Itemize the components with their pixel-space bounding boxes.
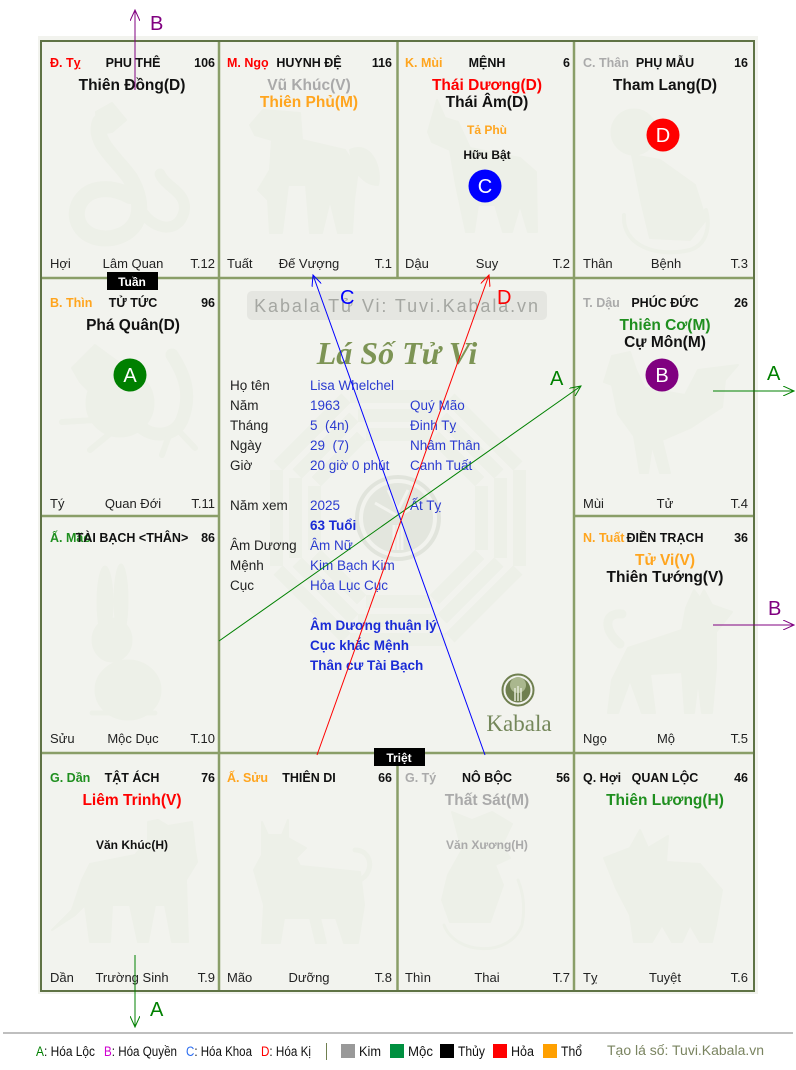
- footer rule: [3, 1032, 793, 1034]
- palace: Quan Lộc: 46: [734, 771, 748, 785]
- chart title: Lá Số Tử Vi: [316, 335, 477, 371]
- legend: five elements: Hỏa: [511, 1044, 534, 1059]
- watermark banner: [247, 291, 547, 320]
- palace: Điền Trạch: Mộ: [657, 731, 675, 746]
- palace: Nô Bộc: Văn Xương(H): [446, 838, 528, 852]
- palace: Thiên Di: THIÊN DI: [282, 770, 336, 785]
- palace: Điền Trạch: Thiên Tướng(V): [607, 569, 723, 586]
- personal information block: Hỏa Lục Cục: [310, 578, 388, 593]
- arrow: C blue diagonal: [313, 275, 485, 755]
- palace: Mệnh: Suy: [476, 256, 499, 271]
- arrow: D red diagonal: D: [497, 287, 511, 309]
- palace: Thiên Di: Dưỡng: [288, 970, 330, 985]
- palace: Tật Ách: [50, 770, 215, 985]
- palace: Phúc Đức: [583, 295, 748, 511]
- palace: Quan Lộc: Thiên Lương(H): [606, 792, 724, 809]
- palace: Tật Ách: T.9: [198, 970, 215, 985]
- palace: Tật Ách: 76: [201, 771, 215, 785]
- personal information block: Đinh Tỵ: [410, 418, 457, 433]
- arrow: B purple right: B: [768, 598, 781, 620]
- palace: Phúc Đức: B: [655, 365, 669, 387]
- palace: Nô Bộc: Thai: [474, 970, 500, 985]
- personal information block: Năm xem: [230, 498, 288, 513]
- arrow: B purple right: [713, 598, 794, 625]
- personal information block: Họ tên: [230, 378, 270, 393]
- palace: Phúc Đức: 26: [734, 296, 748, 310]
- palace: Phúc Đức: Thiên Cơ(M): [619, 317, 711, 334]
- personal information block: Ngày: [230, 438, 262, 453]
- palace: Quan Lộc: Tuyệt: [649, 970, 681, 985]
- palace: Tật Ách: Trường Sinh: [95, 970, 169, 985]
- personal information block: Âm Dương thuận lý: [310, 618, 437, 633]
- palace: Phu Thê: [50, 55, 215, 271]
- personal information block: Kim Bạch Kim: [310, 558, 395, 573]
- zodiac watermark illustrations: [52, 100, 738, 949]
- personal information block: Năm: [230, 398, 259, 413]
- legend: five elements: Thủy: [458, 1044, 485, 1059]
- palace: Phụ Mẫu: C. Thân: [583, 56, 629, 70]
- palace: Tật Ách: Văn Khúc(H): [96, 838, 168, 852]
- badge: Triệt: Triệt: [386, 751, 412, 765]
- palace: Phụ Mẫu: [583, 55, 748, 271]
- palace: Tử Tức: 96: [201, 296, 215, 310]
- legend: five elements: Mộc: [408, 1044, 433, 1059]
- palace: Huynh Đệ: Tuất: [227, 256, 253, 271]
- palace: Tật Ách: TẬT ÁCH: [105, 770, 159, 785]
- palace: Tài Bạch: Mộc Dục: [107, 731, 159, 746]
- palace: Mệnh: Dậu: [405, 256, 429, 271]
- palace: Nô Bộc: 56: [556, 771, 570, 785]
- palace: Phu Thê: Đ. Tỵ: [50, 56, 81, 70]
- palace: Điền Trạch: Tử Vi(V): [635, 552, 695, 569]
- palace: Tài Bạch: Ấ. Mão: [50, 530, 91, 545]
- palace: Nô Bộc: G. Tý: [405, 771, 436, 785]
- personal information block: Lisa Whelchel: [310, 378, 394, 393]
- palace: Mệnh: Tả Phù: [467, 123, 507, 137]
- palace: Quan Lộc: Tỵ: [583, 970, 598, 985]
- arrow: A green diagonal: [219, 368, 581, 641]
- personal information block: 63 Tuổi: [310, 518, 356, 533]
- badge: Triệt: [374, 748, 425, 766]
- legend: five elements: Kim: [359, 1044, 381, 1059]
- palace: Mệnh: MỆNH: [469, 55, 505, 70]
- personal information block: Tháng: [230, 418, 268, 433]
- palace: Mệnh: C: [478, 176, 492, 198]
- Kabala logo: Kabala: [486, 711, 552, 736]
- palace: Thiên Di: 66: [378, 771, 392, 785]
- legend: transformations: C: Hóa Khoa: [186, 1044, 252, 1059]
- palace: Phúc Đức: T. Dậu: [583, 296, 620, 310]
- palace: Nô Bộc: [405, 770, 570, 985]
- palace: Tử Tức: A: [123, 365, 137, 387]
- palace: Tài Bạch: 86: [201, 531, 215, 545]
- palace: Phúc Đức: Cự Môn(M): [624, 334, 706, 351]
- palace: Phu Thê: 106: [194, 56, 215, 70]
- palace: Thiên Di: [227, 770, 392, 985]
- palace: Tật Ách: Dần: [50, 970, 74, 985]
- palace: Tử Tức: Phá Quân(D): [86, 317, 180, 334]
- arrow: B purple up: [135, 10, 163, 90]
- palace: Phúc Đức: T.4: [731, 496, 748, 511]
- arrow: D red diagonal: [317, 275, 511, 755]
- personal information block: 29 (7): [310, 438, 349, 453]
- palace: Phụ Mẫu: Bệnh: [651, 256, 681, 271]
- palace: Mệnh: Thái Dương(D): [432, 77, 542, 94]
- watermark banner: Kabala Tử Vi: Tuvi.Kabala.vn: [254, 296, 540, 316]
- personal information block: [230, 378, 480, 673]
- palace: Tật Ách: G. Dần: [50, 771, 90, 785]
- palace: Điền Trạch: [583, 530, 748, 746]
- palace: Mệnh: K. Mùi: [405, 56, 442, 70]
- personal information block: Cục: [230, 578, 254, 593]
- palace: Tử Tức: TỬ TỨC: [109, 295, 157, 310]
- legend: transformations: A: Hóa Lộc: [36, 1044, 95, 1059]
- palace: Huynh Đệ: M. Ngọ: [227, 56, 269, 70]
- palace: Điền Trạch: 36: [734, 531, 748, 545]
- legend divider: [326, 1043, 328, 1060]
- personal information block: Mệnh: [230, 558, 264, 573]
- personal information block: 2025: [310, 498, 340, 513]
- palace: Tử Tức: [50, 295, 215, 511]
- legend: five elements: [341, 1044, 582, 1059]
- palace: Huynh Đệ: Vũ Khúc(V): [267, 77, 351, 94]
- palace: Huynh Đệ: HUYNH ĐỆ: [276, 55, 342, 70]
- arrow: A green right: [713, 363, 794, 391]
- bagua watermark in centre: [270, 390, 526, 646]
- palace: Huynh Đệ: 116: [372, 56, 392, 70]
- palace: Tử Tức: T.11: [191, 496, 215, 511]
- legend: five elements: Thổ: [561, 1044, 582, 1059]
- palace: Tài Bạch: [50, 530, 215, 746]
- palace: Nô Bộc: Thìn: [405, 970, 431, 985]
- personal information block: 1963: [310, 398, 340, 413]
- legend: transformations: D: Hóa Kị: [261, 1044, 311, 1059]
- palace: Phúc Đức: Tử: [657, 496, 674, 511]
- palace: Huynh Đệ: T.1: [375, 256, 392, 271]
- personal information block: Âm Dương: [230, 538, 297, 553]
- palace: Điền Trạch: T.5: [731, 731, 748, 746]
- personal information block: Cục khắc Mệnh: [310, 638, 409, 653]
- palace: Tử Tức: B. Thìn: [50, 296, 92, 310]
- palace: Phu Thê: T.12: [190, 256, 215, 271]
- palace: Phụ Mẫu: D: [656, 125, 670, 147]
- palace: Nô Bộc: NÔ BỘC: [462, 770, 512, 785]
- arrow: C blue diagonal: C: [340, 287, 354, 309]
- palace: Phúc Đức: Mùi: [583, 496, 604, 511]
- arrow: A green down: A: [150, 999, 164, 1021]
- palace: Phu Thê: Hợi: [50, 256, 71, 271]
- arrow: A green right: A: [767, 363, 781, 385]
- palace: Phụ Mẫu: PHỤ MẪU: [636, 55, 694, 70]
- badge: Tuần: [107, 272, 158, 290]
- palace: Nô Bộc: Thất Sát(M): [445, 792, 529, 809]
- personal information block: 20 giờ 0 phút: [310, 458, 390, 473]
- personal information block: Nhâm Thân: [410, 438, 480, 453]
- palace: Quan Lộc: Q. Hợi: [583, 771, 621, 785]
- palace: Phụ Mẫu: Thân: [583, 256, 613, 271]
- palace: Quan Lộc: QUAN LỘC: [632, 770, 698, 785]
- personal information block: Canh Tuất: [410, 458, 473, 473]
- palace: Phụ Mẫu: 16: [734, 56, 748, 70]
- personal information block: 5 (4n): [310, 418, 349, 433]
- legend: transformations: B: Hóa Quyền: [104, 1044, 177, 1059]
- palace: Mệnh: [405, 55, 570, 271]
- palace: Huynh Đệ: Đế Vượng: [279, 256, 339, 271]
- palace: Phúc Đức: PHÚC ĐỨC: [631, 295, 699, 310]
- palace: Quan Lộc: [583, 770, 748, 985]
- chart grid lines: [41, 41, 754, 991]
- Kabala logo: [486, 674, 552, 736]
- badge: Tuần: Tuần: [118, 275, 146, 289]
- footer site credit: Tạo lá số: Tuvi.Kabala.vn: [607, 1043, 764, 1058]
- palace: Tử Tức: Quan Đới: [105, 496, 161, 511]
- palace: Phu Thê: Thiên Đồng(D): [79, 77, 185, 94]
- palace: Điền Trạch: ĐIỀN TRẠCH: [626, 530, 704, 545]
- personal information block: Giờ: [230, 458, 252, 473]
- palace: Mệnh: Hữu Bật: [463, 148, 511, 162]
- palace: Tử Tức: Tý: [50, 496, 65, 511]
- personal information block: Ất Tỵ: [410, 498, 442, 513]
- arrow: A green diagonal: A: [550, 368, 564, 390]
- palace: Huynh Đệ: [227, 55, 392, 271]
- palace: Điền Trạch: Ngọ: [583, 731, 607, 746]
- palace: Quan Lộc: T.6: [731, 970, 748, 985]
- palace: Thiên Di: Mão: [227, 970, 252, 985]
- palace: Nô Bộc: T.7: [553, 970, 570, 985]
- palace: Tài Bạch: Sửu: [50, 731, 75, 746]
- palace: Phụ Mẫu: Tham Lang(D): [613, 77, 717, 94]
- arrow: B purple up: B: [150, 13, 163, 35]
- palace: Mệnh: T.2: [553, 256, 570, 271]
- palace: Tài Bạch: TÀI BẠCH <THÂN>: [76, 530, 188, 545]
- palace: Thiên Di: Ấ. Sửu: [227, 770, 268, 785]
- personal information block: Âm Nữ: [310, 538, 353, 553]
- palace: Thiên Di: T.8: [375, 970, 392, 985]
- palace: Phu Thê: PHU THÊ: [106, 55, 160, 70]
- legend: transformations: [36, 1044, 311, 1059]
- palace: Mệnh: 6: [563, 56, 570, 70]
- personal information block: Quý Mão: [410, 398, 465, 413]
- palace: Huynh Đệ: Thiên Phủ(M): [260, 94, 358, 111]
- palace: Tật Ách: Liêm Trinh(V): [82, 792, 182, 809]
- palace: Phu Thê: Lâm Quan: [103, 256, 163, 271]
- palace: Phụ Mẫu: T.3: [731, 256, 748, 271]
- personal information block: Thân cư Tài Bạch: [310, 658, 423, 673]
- palace: Tài Bạch: T.10: [190, 731, 215, 746]
- arrow: A green down: [135, 955, 164, 1027]
- palace: Điền Trạch: N. Tuất: [583, 531, 625, 545]
- palace: Mệnh: Thái Âm(D): [446, 93, 528, 111]
